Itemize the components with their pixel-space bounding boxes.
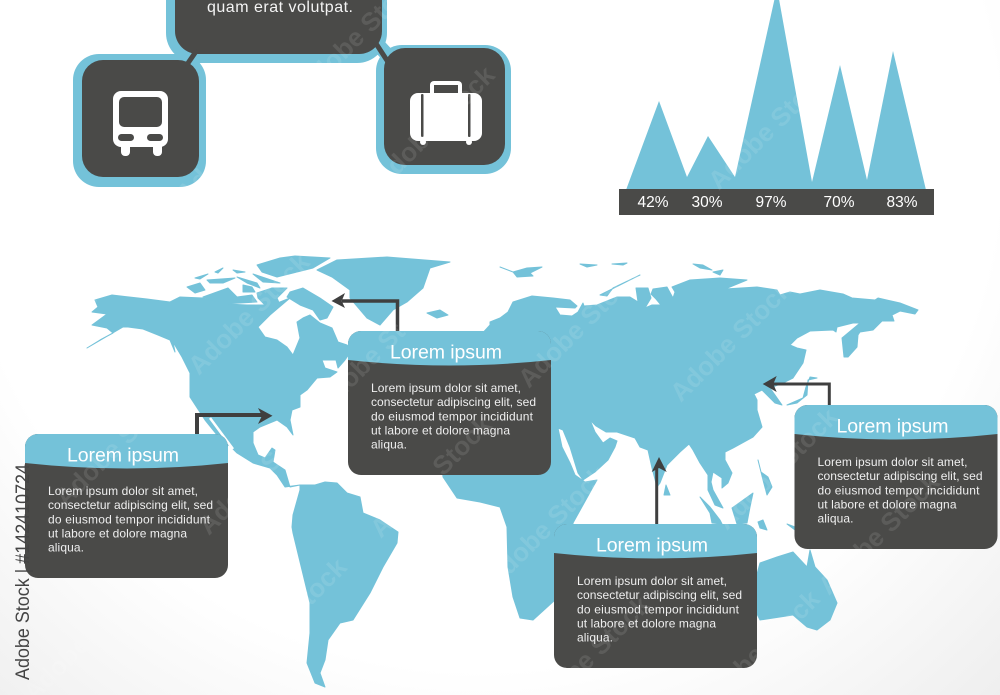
- peaks: [626, 0, 926, 190]
- callout: centre top: aliqua.: [371, 438, 407, 452]
- callout: centre top: [348, 331, 551, 475]
- watermarks: Adobe Stock: [364, 409, 498, 543]
- callout: centre top: Lorem ipsum: [390, 342, 502, 364]
- arrow: to North America: [197, 408, 272, 434]
- panel: top text bubble: [166, 0, 387, 63]
- callout: right: do eiusmod tempor incididunt: [818, 484, 980, 498]
- callout: left: aliqua.: [48, 540, 84, 554]
- chart values: 83%: [886, 194, 918, 211]
- callout: left: do eiusmod tempor incididunt: [48, 512, 211, 526]
- connectors: blue: [188, 36, 392, 68]
- callout: right: ut labore et dolore magna: [818, 498, 957, 512]
- arrow: to India: [652, 457, 667, 524]
- watermarks: Adobe Stock: [479, 459, 613, 593]
- icon: bus tile: [73, 54, 206, 187]
- callout: right: Lorem ipsum: [836, 416, 948, 438]
- callout: left: ut labore et dolore magna: [48, 526, 187, 540]
- callout: centre bottom: [554, 524, 757, 668]
- watermarks: Adobe Stock: [192, 406, 326, 540]
- watermarks: Adobe Stock: [219, 551, 353, 685]
- chart values: 42%: [638, 194, 668, 211]
- watermarks: Adobe Stock: [170, 74, 304, 208]
- map: australia: [750, 550, 837, 630]
- chart values: [638, 194, 918, 211]
- watermarks: Adobe Stock: [309, 284, 443, 418]
- callout: right: [794, 405, 998, 549]
- map: greenland: [317, 257, 450, 325]
- callout: centre bottom: do eiusmod tempor incididunt: [577, 602, 740, 616]
- map: eurasia and africa: [433, 278, 918, 620]
- watermarks: Adobe Stock: [512, 259, 646, 393]
- connector lines: dark: [186, 42, 388, 66]
- watermarks: Adobe Stock: [367, 59, 501, 193]
- panel: transport icons: [73, 0, 511, 187]
- watermarks: Adobe Stock: [702, 61, 836, 195]
- map: arctic islands: [187, 256, 448, 320]
- chart values: 97%: [756, 194, 786, 211]
- watermarks: Adobe Stock: [182, 246, 316, 380]
- callout: centre bottom: Lorem ipsum: [596, 534, 708, 556]
- watermarks: Adobe Stock: [869, 239, 1000, 373]
- callout: right: consectetur adipiscing elit, sed: [818, 469, 982, 483]
- arrow: to East Asia: [763, 376, 829, 405]
- callout: right: Lorem ipsum dolor sit amet,: [818, 455, 968, 469]
- map: baja california strait: [210, 418, 233, 449]
- callout: centre top: Lorem ipsum dolor sit amet,: [371, 381, 521, 395]
- callout: left: [25, 434, 228, 578]
- callout: left: consectetur adipiscing elit, sed: [48, 498, 213, 512]
- callout: left: Lorem ipsum dolor sit amet,: [48, 484, 198, 498]
- arrow: to Greenland: [332, 293, 398, 331]
- map: south america: [292, 482, 398, 687]
- chart values: 30%: [692, 194, 722, 211]
- callout: centre bottom: aliqua.: [577, 630, 613, 644]
- callout: centre top: consectetur adipiscing elit, sed: [371, 395, 536, 409]
- callout: centre bottom: ut labore et dolore magna: [577, 616, 716, 630]
- chart label bar: [619, 189, 934, 215]
- icon: suitcase tile: [376, 45, 511, 174]
- chart values: 70%: [824, 194, 854, 211]
- map: asian and northern islands: [500, 263, 817, 530]
- watermarks: Adobe Stock: [49, 378, 183, 512]
- watermarks: Adobe Stock: [710, 401, 844, 535]
- callout: left: Lorem ipsum: [67, 444, 179, 466]
- callout: centre top: ut labore et dolore magna: [371, 424, 510, 438]
- world map: [87, 256, 918, 687]
- callout: centre bottom: Lorem ipsum dolor sit amet,: [577, 574, 727, 588]
- callout: right: aliqua.: [818, 512, 854, 526]
- watermarks: Adobe Stock: [812, 466, 946, 600]
- bar chart: peak chart: [619, 0, 934, 215]
- callout: centre top: do eiusmod tempor incididunt: [371, 410, 534, 424]
- stock id label: Adobe Stock | #142410724: [13, 464, 34, 680]
- callout: centre bottom: consectetur adipiscing elit, sed: [577, 588, 742, 602]
- map: north america: [87, 295, 352, 487]
- watermarks: Adobe Stock: [664, 273, 798, 407]
- watermarks: Adobe Stock: [0, 251, 134, 385]
